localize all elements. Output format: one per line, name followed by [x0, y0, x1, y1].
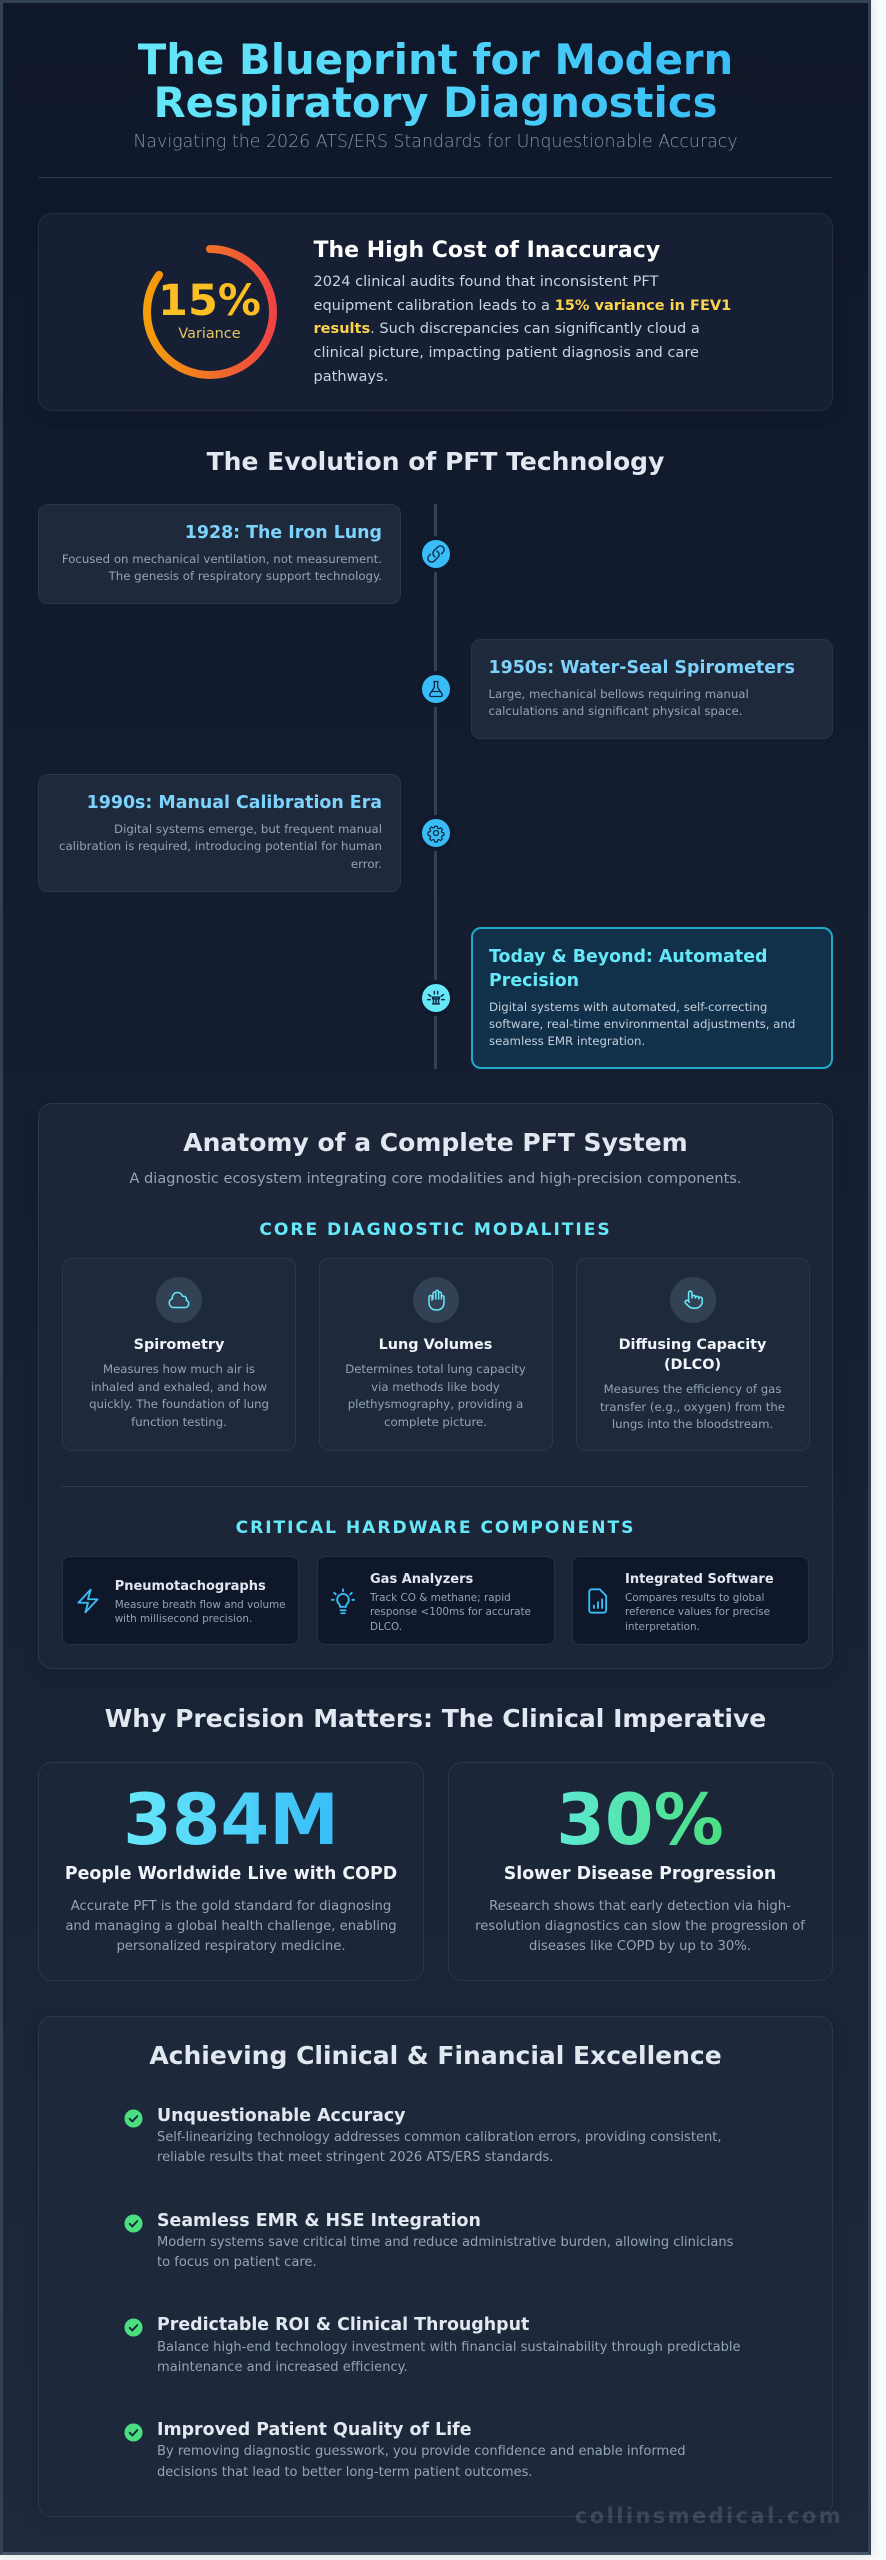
- node icon: gear: [418, 814, 454, 850]
- benefit 1 title: Unquestionable Accuracy: [157, 2106, 406, 2126]
- benefit 4 text: By removing diagnostic guesswork, you provide confidence and enable informed: [157, 2444, 686, 2459]
- panel: high cost of inaccuracy: [38, 213, 833, 411]
- stat text COPD: Accurate PFT is the gold standard for diagnosing: [71, 1898, 391, 1914]
- integrated software text: Compares results to global: [625, 1592, 764, 1604]
- panel: achieving excellence: [38, 2016, 833, 2517]
- excellence heading: Achieving Clinical & Financial Excellence: [149, 2040, 722, 2070]
- pneumotachographs text: [115, 1598, 286, 1625]
- anatomy subtitle: A diagnostic ecosystem integrating core modalities and high-precision components.: [129, 1170, 742, 1187]
- gas analyzers text: [370, 1592, 531, 1632]
- gas analyzers name: Gas Analyzers: [370, 1572, 473, 1587]
- icon: pointer: [670, 1276, 716, 1322]
- gauge: 15% variance ring: [143, 245, 277, 379]
- subheading: core modalities: CORE DIAGNOSTIC MODALITIES: [259, 1220, 612, 1240]
- pneumotachographs name: Pneumotachographs: [115, 1579, 266, 1594]
- benefit 3 text: maintenance and increased efficiency.: [157, 2360, 408, 2375]
- 1990s text: Digital systems emerge, but frequent manual: [114, 822, 382, 836]
- spirometry text: inhaled and exhaled, and how: [91, 1380, 267, 1394]
- check icon 1: [124, 2110, 142, 2128]
- integrated software text: reference values for precise: [625, 1606, 770, 1618]
- check icon 4: [124, 2424, 142, 2442]
- stat text COPD: [65, 1898, 397, 1954]
- stat text COPD: and managing a global health challenge, enabling: [65, 1919, 397, 1934]
- diffusing capacity text: [600, 1382, 785, 1431]
- gauge value: 15%: [158, 276, 261, 326]
- benefit 3 title: Predictable ROI & Clinical Throughput: [157, 2315, 529, 2335]
- gas analyzers text: Track CO & methane; rapid: [370, 1592, 511, 1604]
- timeline card: today: [470, 926, 833, 1069]
- spirometry text: quickly. The foundation of lung: [89, 1397, 269, 1411]
- stat card: progression: [448, 1762, 833, 1981]
- callout body: [314, 273, 731, 385]
- icon: data file: [588, 1588, 608, 1614]
- 1950s text: [488, 687, 749, 718]
- subtitle: Navigating the 2026 ATS/ERS Standards for Unquestionable Accuracy: [133, 132, 738, 152]
- icon: hand: [412, 1276, 458, 1322]
- callout body: 2024 clinical audits found that inconsistent PFT: [314, 273, 658, 290]
- today text: seamless EMR integration.: [489, 1034, 645, 1048]
- diffusing capacity text: Measures the efficiency of gas: [604, 1382, 781, 1396]
- 1928 title: 1928: The Iron Lung: [185, 523, 382, 543]
- stat text progression: diseases like COPD by up to 30%.: [529, 1939, 751, 1954]
- benefit 2 title: Seamless EMR & HSE Integration: [157, 2211, 481, 2231]
- icon: light bulb: [331, 1588, 355, 1614]
- hardware card: integrated software: [572, 1556, 809, 1645]
- today title: Precision: [489, 970, 579, 990]
- title: [138, 34, 733, 127]
- lung volumes text: complete picture.: [384, 1414, 487, 1428]
- integrated software text: [625, 1592, 770, 1632]
- benefit 1 text: [157, 2130, 722, 2165]
- icon: cloud: [156, 1276, 202, 1322]
- lung volumes name: Lung Volumes: [379, 1337, 492, 1353]
- benefit 3 text: Balance high-end technology investment with financial sustainability through predictable: [157, 2340, 741, 2354]
- benefit 2 text: Modern systems save critical time and reduce administrative burden, allowing clinicians: [157, 2235, 733, 2250]
- today title: Today & Beyond: Automated: [489, 947, 767, 967]
- stat text progression: [475, 1898, 806, 1954]
- spirometry text: Measures how much air is: [103, 1362, 255, 1376]
- diffusing capacity name: Diffusing Capacity: [619, 1337, 766, 1353]
- callout body: results. Such discrepancies can significantly cloud a: [314, 320, 700, 337]
- node icon: flask: [418, 671, 454, 707]
- stat value 384M: 384M: [123, 1779, 339, 1861]
- 1928 text: [62, 552, 382, 583]
- stat card: COPD: [38, 1762, 424, 1981]
- module card: lung volumes: [318, 1258, 552, 1451]
- pneumotachographs text: Measure breath flow and volume: [115, 1598, 286, 1610]
- heading: evolution: The Evolution of PFT Technology: [207, 446, 664, 476]
- benefit 2 text: to focus on patient care.: [157, 2255, 317, 2270]
- 1950s text: calculations and significant physical space.: [488, 704, 743, 718]
- 1950s text: Large, mechanical bellows requiring manual: [488, 687, 749, 701]
- panel: anatomy of a complete PFT system: [38, 1103, 833, 1669]
- diffusing capacity text: transfer (e.g., oxygen) from the: [600, 1400, 785, 1414]
- timeline axis: [434, 504, 437, 1069]
- gas analyzers text: response <100ms for accurate: [370, 1606, 531, 1618]
- 1928 text: The genesis of respiratory support technology.: [109, 569, 382, 583]
- anatomy heading: Anatomy of a Complete PFT System: [183, 1128, 688, 1157]
- benefit 4 text: decisions that lead to better long-term patient outcomes.: [157, 2464, 533, 2480]
- node icon: automation chip: [418, 980, 454, 1016]
- gas analyzers text: DLCO.: [370, 1620, 402, 1632]
- timeline card: 1950s: [470, 639, 833, 739]
- spirometry name: Spirometry: [134, 1337, 224, 1353]
- 1990s title: 1990s: Manual Calibration Era: [87, 793, 382, 813]
- check icon 2: [124, 2214, 142, 2232]
- callout heading: The High Cost of Inaccuracy: [314, 238, 660, 262]
- stat label progression: Slower Disease Progression: [504, 1864, 776, 1884]
- stat label COPD: People Worldwide Live with COPD: [65, 1864, 397, 1884]
- node icon: link: [418, 536, 454, 572]
- 1950s title: 1950s: Water-Seal Spirometers: [488, 658, 795, 678]
- benefit 1 text: Self-linearizing technology addresses common calibration errors, providing consistent,: [157, 2130, 722, 2145]
- check icon 3: [124, 2318, 142, 2336]
- timeline card: 1928: [38, 504, 401, 604]
- diffusing capacity text: lungs into the bloodstream.: [612, 1417, 773, 1431]
- hardware card: gas analyzers: [316, 1556, 554, 1645]
- diffusing capacity name: [619, 1337, 766, 1373]
- stat text progression: resolution diagnostics can slow the progression of: [475, 1919, 805, 1934]
- pneumotachographs text: with millisecond precision.: [115, 1613, 252, 1625]
- benefit 2 text: [157, 2235, 733, 2270]
- integrated software name: Integrated Software: [625, 1572, 774, 1587]
- benefit 4 text: [157, 2444, 686, 2480]
- lung volumes text: Determines total lung capacity: [345, 1362, 526, 1376]
- icon: bolt: [77, 1588, 99, 1614]
- callout body: pathways.: [314, 368, 388, 385]
- 1990s text: [59, 822, 382, 871]
- heading: why precision matters: Why Precision Matters: The Clinical Imperative: [105, 1704, 766, 1733]
- subheading: hardware: CRITICAL HARDWARE COMPONENTS: [236, 1518, 635, 1538]
- watermark: collinsmedical.com: [575, 2504, 843, 2528]
- hardware card: pneumotachographs: [62, 1556, 298, 1645]
- today text: Digital systems with automated, self-correcting: [489, 1000, 767, 1014]
- module card: spirometry: [62, 1258, 296, 1451]
- stat value 30%: 30%: [556, 1779, 724, 1861]
- lung volumes text: [345, 1362, 526, 1428]
- diffusing capacity name: (DLCO): [664, 1357, 721, 1373]
- stat text progression: Research shows that early detection via high-: [489, 1898, 791, 1914]
- spirometry text: function testing.: [131, 1414, 227, 1428]
- callout body: clinical picture, impacting patient diagnosis and care: [314, 344, 699, 361]
- today text: [489, 1000, 795, 1048]
- benefit 3 text: [157, 2340, 741, 2375]
- lung volumes text: via methods like body: [371, 1380, 500, 1394]
- spirometry text: [89, 1362, 269, 1428]
- title: The Blueprint for Modern: [138, 34, 733, 84]
- 1928 text: Focused on mechanical ventilation, not measurement.: [62, 552, 382, 566]
- today title: [489, 947, 767, 990]
- module card: diffusing capacity: [576, 1258, 810, 1451]
- integrated software text: interpretation.: [625, 1620, 700, 1632]
- benefit 1 text: reliable results that meet stringent 2026 ATS/ERS standards.: [157, 2150, 553, 2165]
- lung volumes text: plethysmography, providing a: [348, 1397, 523, 1411]
- stat text COPD: personalized respiratory medicine.: [116, 1939, 346, 1954]
- title: Respiratory Diagnostics: [153, 78, 718, 127]
- 1990s text: calibration is required, introducing potential for human: [59, 839, 382, 853]
- gauge label: Variance: [178, 326, 241, 342]
- timeline card: 1990s: [38, 774, 401, 892]
- callout body: equipment calibration leads to a 15% variance in FEV1: [314, 297, 731, 314]
- today text: software, real-time environmental adjustments, and: [489, 1017, 795, 1031]
- 1990s text: error.: [351, 857, 382, 871]
- benefit 4 title: Improved Patient Quality of Life: [157, 2420, 472, 2440]
